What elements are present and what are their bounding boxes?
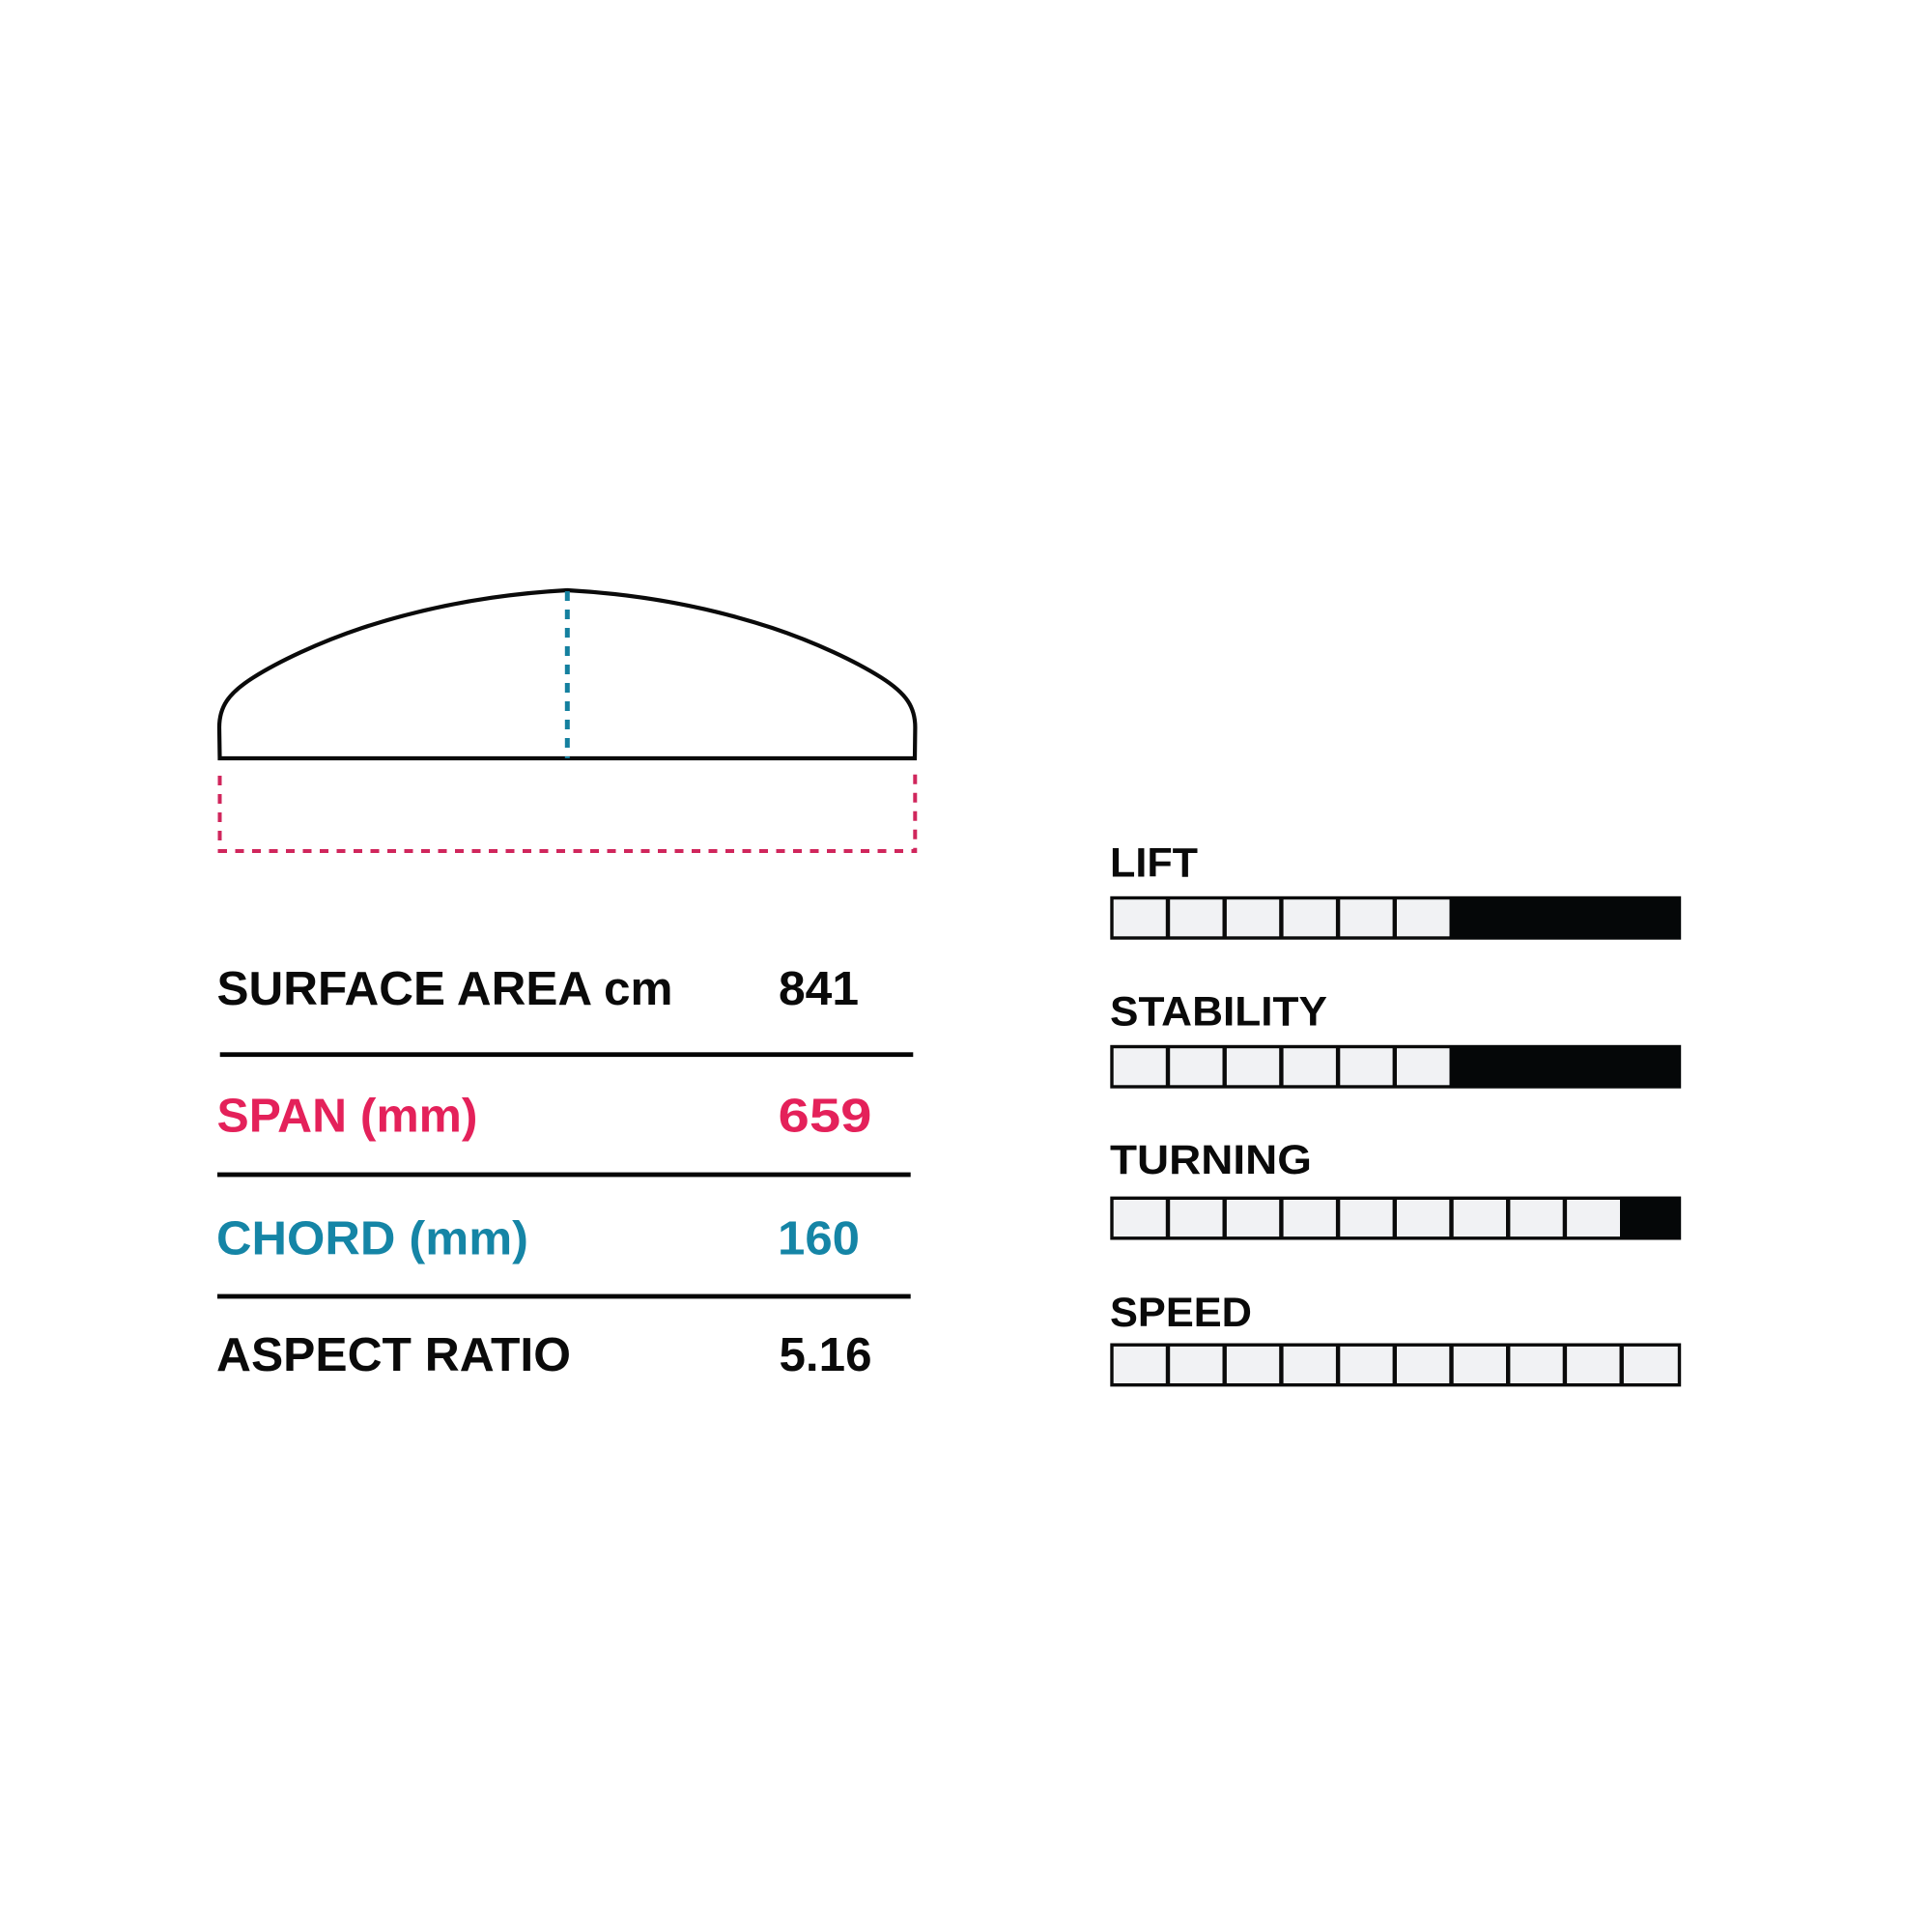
rating bar: lift: [1112, 896, 1681, 939]
row: span: [216, 1090, 871, 1142]
label: stability: STABILITY: [1110, 989, 1327, 1036]
row: span: SPAN (mm): [216, 1090, 477, 1142]
diagram: wing outline with span and chord: [218, 590, 917, 853]
label: speed: SPEED: [1110, 1290, 1252, 1336]
row: surface area: 841: [779, 963, 859, 1015]
chord dashed line: [565, 591, 570, 758]
wing outline: [219, 590, 915, 758]
label: turning: TURNING: [1110, 1137, 1312, 1183]
row: aspect ratio: 5.16: [779, 1329, 871, 1381]
table dividers: [217, 1052, 913, 1298]
row: chord: 160: [778, 1213, 860, 1265]
row: chord: CHORD (mm): [216, 1213, 528, 1265]
panel: specification table: [216, 963, 913, 1381]
rating: speed: [1110, 1290, 1679, 1385]
label: lift: LIFT: [1110, 840, 1198, 887]
panel: performance ratings: [1110, 840, 1681, 1385]
row: aspect ratio: [216, 1329, 871, 1381]
rating bar: stability: [1112, 1045, 1681, 1088]
row: span: 659: [779, 1090, 871, 1142]
span dashed bracket: [218, 775, 917, 853]
rating: lift: [1110, 840, 1681, 939]
rating bar: turning: [1112, 1197, 1681, 1239]
row: aspect ratio: ASPECT RATIO: [216, 1329, 571, 1381]
rating bar: speed: [1112, 1345, 1679, 1385]
rating: turning: [1110, 1137, 1681, 1239]
row: surface area: SURFACE AREA cm: [216, 963, 672, 1015]
row: chord: [216, 1213, 860, 1265]
rating: stability: [1110, 989, 1681, 1088]
